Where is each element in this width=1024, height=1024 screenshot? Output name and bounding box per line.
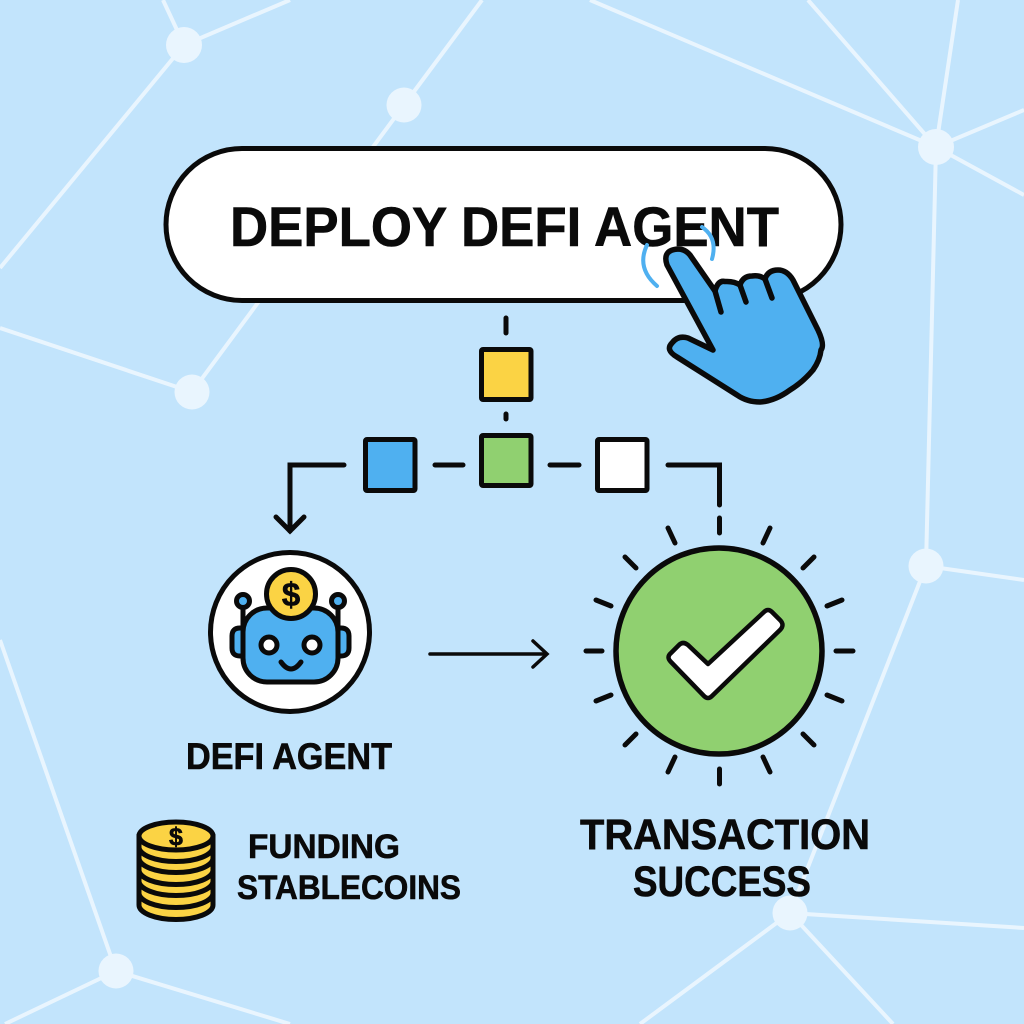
icon: success sun rays xyxy=(586,528,853,784)
label: transaction success: TRANSACTION xyxy=(580,811,870,859)
icon: DeFi agent robot xyxy=(210,552,370,712)
label: funding stablecoins: FUNDING xyxy=(248,828,400,866)
flow block: white xyxy=(598,440,647,490)
coin dollar sign: $ xyxy=(169,823,183,851)
robot antennas xyxy=(236,594,344,640)
label: funding stablecoins xyxy=(237,828,461,907)
flow block: yellow xyxy=(482,350,531,400)
button pill xyxy=(166,148,841,300)
icon: pointing hand xyxy=(666,249,822,402)
flow connectors xyxy=(276,318,720,533)
arrow: agent to success xyxy=(430,641,547,667)
label: transaction success: SUCCESS xyxy=(633,858,811,906)
flow block: green xyxy=(482,436,531,486)
label: funding stablecoins: STABLECOINS xyxy=(237,869,461,907)
label: DeFi Agent: DEFI AGENT xyxy=(186,736,392,777)
green circle xyxy=(616,548,822,754)
flow block: blue xyxy=(366,440,415,490)
button label: DEPLOY DEFI AGENT xyxy=(230,195,779,258)
robot ears xyxy=(232,628,349,656)
icon: stablecoin stack xyxy=(139,822,213,920)
check mark xyxy=(668,610,782,698)
robot smile xyxy=(281,662,301,669)
deploy button xyxy=(166,148,841,300)
dollar coin xyxy=(266,570,316,618)
label: transaction success xyxy=(580,811,870,906)
robot eyes xyxy=(261,637,320,653)
dollar sign: $ xyxy=(282,576,300,613)
icon: tap ripple arcs xyxy=(643,227,714,286)
robot head xyxy=(243,608,338,682)
robot badge circle xyxy=(210,552,370,712)
icon: success check circle xyxy=(616,548,822,754)
